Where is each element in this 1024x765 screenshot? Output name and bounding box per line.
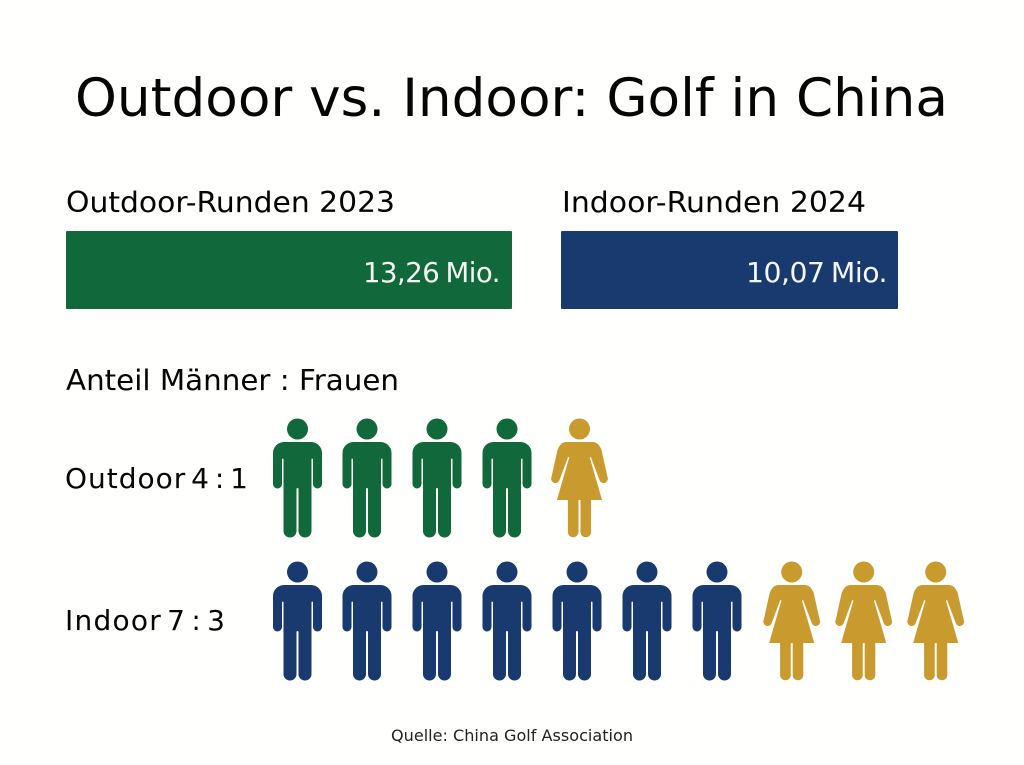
heading: outdoor rounds: Outdoor-Runden 2023	[66, 186, 395, 219]
heading: gender share: Anteil Männer : Frauen	[66, 364, 399, 397]
heading: indoor rounds: Indoor-Runden 2024	[562, 186, 866, 219]
pictogram: outdoor men	[273, 418, 532, 538]
source note: Quelle: China Golf Association	[391, 726, 633, 745]
label: outdoor ratio: Outdoor 4 : 1	[65, 462, 248, 495]
panel: outdoor ratio	[65, 418, 608, 538]
bar: outdoor rounds	[66, 231, 512, 309]
value: outdoor rounds: 13,26 Mio.	[363, 256, 500, 289]
panel: indoor ratio	[65, 562, 964, 680]
pictogram: indoor women	[763, 562, 964, 680]
pictogram: indoor men	[273, 562, 742, 680]
panel: indoor rounds	[561, 186, 898, 309]
label: indoor ratio: Indoor 7 : 3	[65, 604, 225, 637]
value: indoor rounds: 10,07 Mio.	[746, 256, 887, 289]
bar: indoor rounds	[561, 231, 898, 309]
pictogram: outdoor women	[551, 418, 608, 537]
title: Outdoor vs. Indoor: Golf in China	[75, 68, 948, 129]
panel: outdoor rounds	[66, 186, 512, 309]
